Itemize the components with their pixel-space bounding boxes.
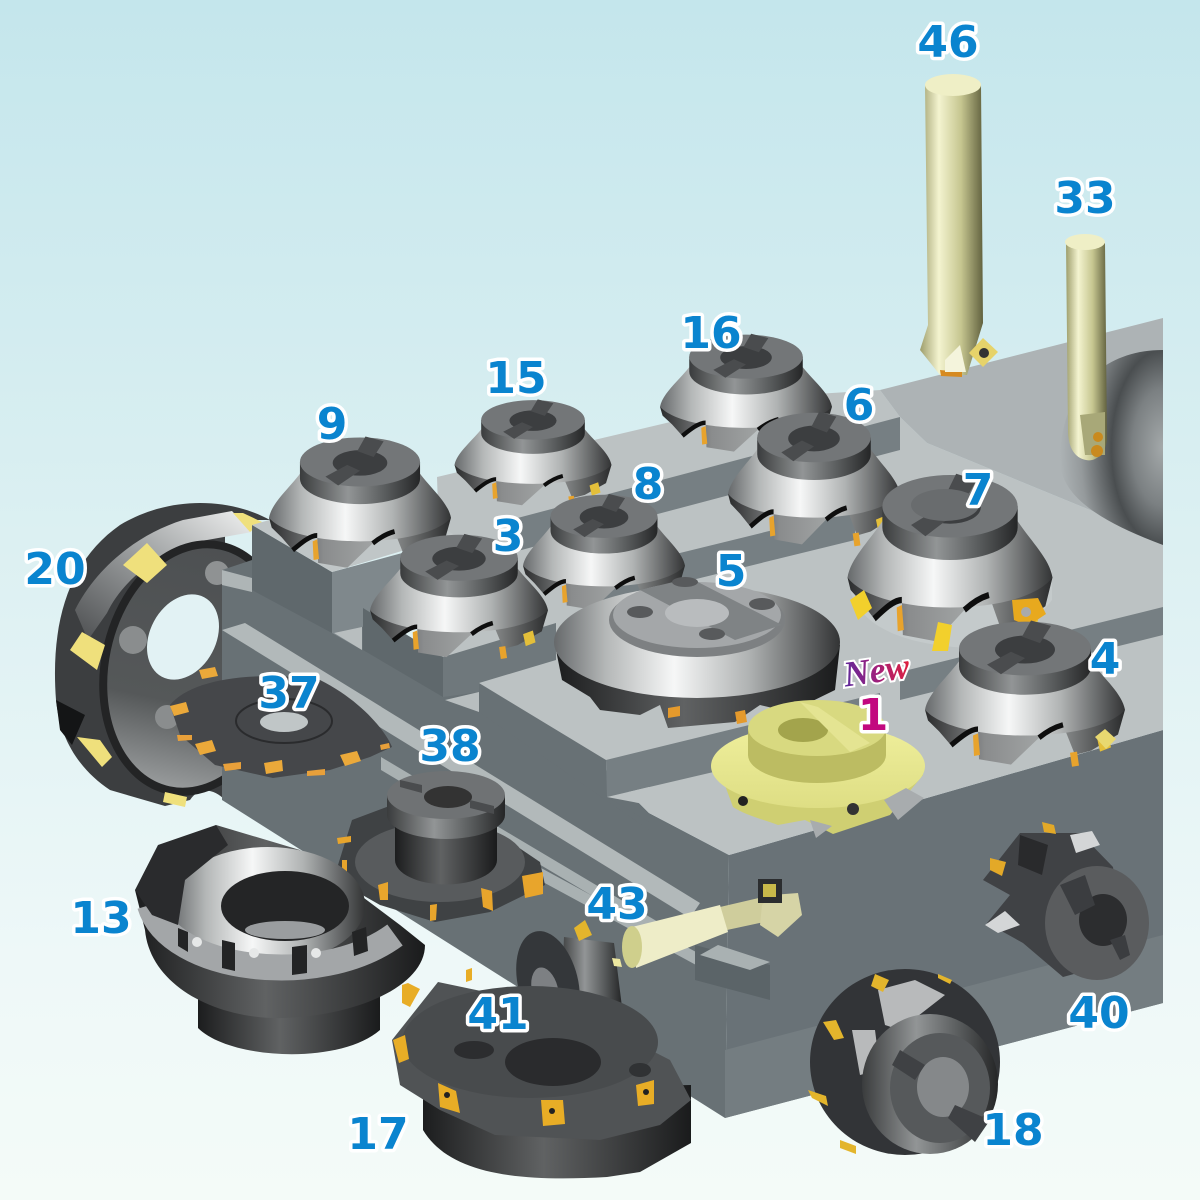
endmill 46 [920, 74, 998, 377]
cutter 5 [554, 577, 840, 728]
cutter 40 [983, 822, 1149, 980]
cutter 41 [506, 920, 622, 1042]
cutter 13 [135, 825, 425, 1054]
cutter 8 [523, 494, 685, 611]
cutter 43 [622, 879, 802, 968]
labels: 3 [493, 511, 523, 562]
cutter 7 [848, 474, 1052, 651]
cutter 1 yellow [711, 700, 925, 838]
cutter 16 [660, 334, 832, 453]
labels: 40 [1068, 988, 1130, 1039]
labels: 5 [716, 546, 746, 597]
labels: 46 [917, 17, 979, 68]
labels: 6 [844, 380, 874, 431]
labels: 15 [485, 353, 547, 404]
cutter 20 large ring [55, 503, 309, 809]
stepped blocks [252, 417, 1163, 805]
labels: 1 [858, 690, 888, 741]
labels: 9 [317, 399, 347, 450]
cutter 6 [728, 412, 900, 546]
cutter 3 [370, 534, 548, 659]
endmill 33 [1065, 234, 1107, 460]
new badge: New [840, 646, 913, 695]
labels: 37 [258, 668, 320, 719]
labels: 33 [1054, 173, 1116, 224]
cutter 18 [808, 969, 1000, 1155]
cutter 9 [269, 436, 451, 570]
labels: 7 [963, 465, 993, 516]
labels: 20 [24, 544, 86, 595]
labels: 18 [982, 1105, 1044, 1156]
labels: 17 [347, 1109, 409, 1160]
labels: 16 [680, 308, 742, 359]
cutter 15 [454, 399, 612, 507]
labels: 13 [70, 893, 132, 944]
labels: 41 [467, 989, 529, 1040]
labels: 4 [1090, 634, 1120, 685]
labels: 43 [586, 879, 648, 930]
cutter 37 flat disc [170, 667, 392, 778]
labels: 8 [633, 459, 663, 510]
labels: 38 [419, 721, 481, 772]
cutter 4 [925, 621, 1125, 767]
machine base block [222, 318, 1163, 1118]
cutter 17 [392, 968, 691, 1178]
cutter 38 [337, 771, 545, 922]
